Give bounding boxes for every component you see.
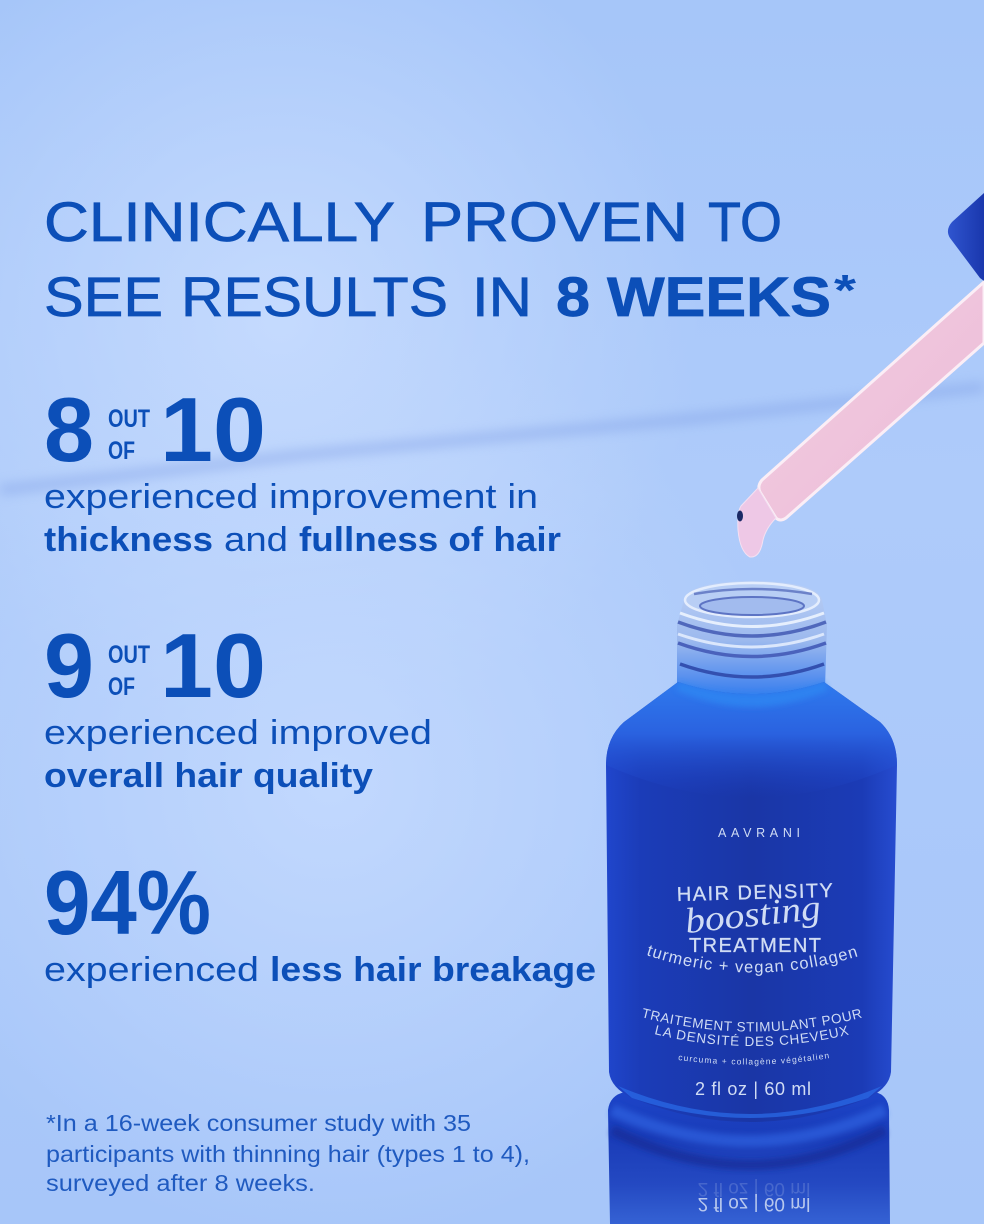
bottle label: turmeric + vegan collagen — [648, 945, 858, 976]
stat: 94 percent: 94% — [44, 853, 211, 954]
bottle — [606, 581, 897, 1122]
bottle label: LA DENSITÉ DES CHEVEUX — [655, 1025, 849, 1046]
stat: 8 out of 10: 10 — [160, 380, 266, 481]
bottle label: TRAITEMENT STIMULANT POUR — [643, 1008, 862, 1032]
bottle label: TREATMENT — [689, 935, 821, 957]
stat: 9 out of 10: 10 — [160, 616, 266, 717]
stat: 9 out of 10 — [44, 616, 432, 795]
bottle label — [643, 826, 862, 1099]
title: PROVEN — [421, 190, 688, 253]
reflection of bottle — [608, 1092, 890, 1224]
stat: 8 out of 10: OUT — [108, 405, 150, 433]
icon: dropper — [737, 193, 984, 557]
bottle label: HAIR DENSITY — [677, 880, 833, 906]
reflection of bottle: 2 fl oz | 60 ml — [698, 1178, 810, 1199]
bottle neck and glass threads — [677, 581, 827, 700]
title: * — [834, 266, 857, 315]
stat: 8 out of 10: OF — [108, 437, 135, 465]
title: IN — [472, 265, 532, 328]
dropper tube — [759, 282, 984, 520]
dropper tip — [738, 488, 776, 557]
title: 8 WEEKS — [556, 265, 831, 328]
footnote: participants with thinning hair (types 1 to 4), — [46, 1141, 530, 1167]
stat: 8 out of 10: fullness of hair — [299, 521, 561, 559]
footnote: surveyed after 8 weeks. — [46, 1170, 315, 1196]
stat: 94 percent: less hair breakage — [270, 951, 596, 989]
title: CLINICALLY — [44, 190, 395, 253]
stat: 9 out of 10: experienced improved — [44, 714, 432, 752]
stat: 94 percent: experienced — [44, 951, 259, 989]
title — [44, 190, 857, 328]
title: RESULTS — [181, 265, 448, 328]
footnote: *In a 16-week consumer study with 35 — [46, 1110, 471, 1136]
stat: 9 out of 10: OUT — [108, 641, 150, 669]
dropper cap — [948, 193, 984, 281]
stat: 8 out of 10: experienced improvement in — [44, 478, 538, 516]
stat: 8 out of 10 — [44, 380, 561, 559]
reflection of bottle: 2 fl oz | 60 ml — [698, 1193, 810, 1214]
bottle label: AAVRANI — [718, 826, 800, 840]
stat: 94 percent — [44, 853, 596, 989]
footnote — [46, 1110, 530, 1196]
bottle label: curcuma + collagène végétalien — [678, 1054, 829, 1066]
bottle label: boosting — [683, 887, 822, 941]
stat: 9 out of 10: overall hair quality — [44, 757, 373, 795]
stat: 8 out of 10: 8 — [44, 380, 94, 481]
title: TO — [708, 190, 782, 253]
bottle body — [606, 682, 897, 1122]
bottle label: 2 fl oz | 60 ml — [695, 1079, 811, 1099]
stat: 9 out of 10: OF — [108, 673, 135, 701]
stat: 8 out of 10: thickness — [44, 521, 213, 559]
stat: 9 out of 10: 9 — [44, 616, 94, 717]
stat: 8 out of 10: and — [224, 521, 288, 559]
title: SEE — [44, 265, 163, 328]
